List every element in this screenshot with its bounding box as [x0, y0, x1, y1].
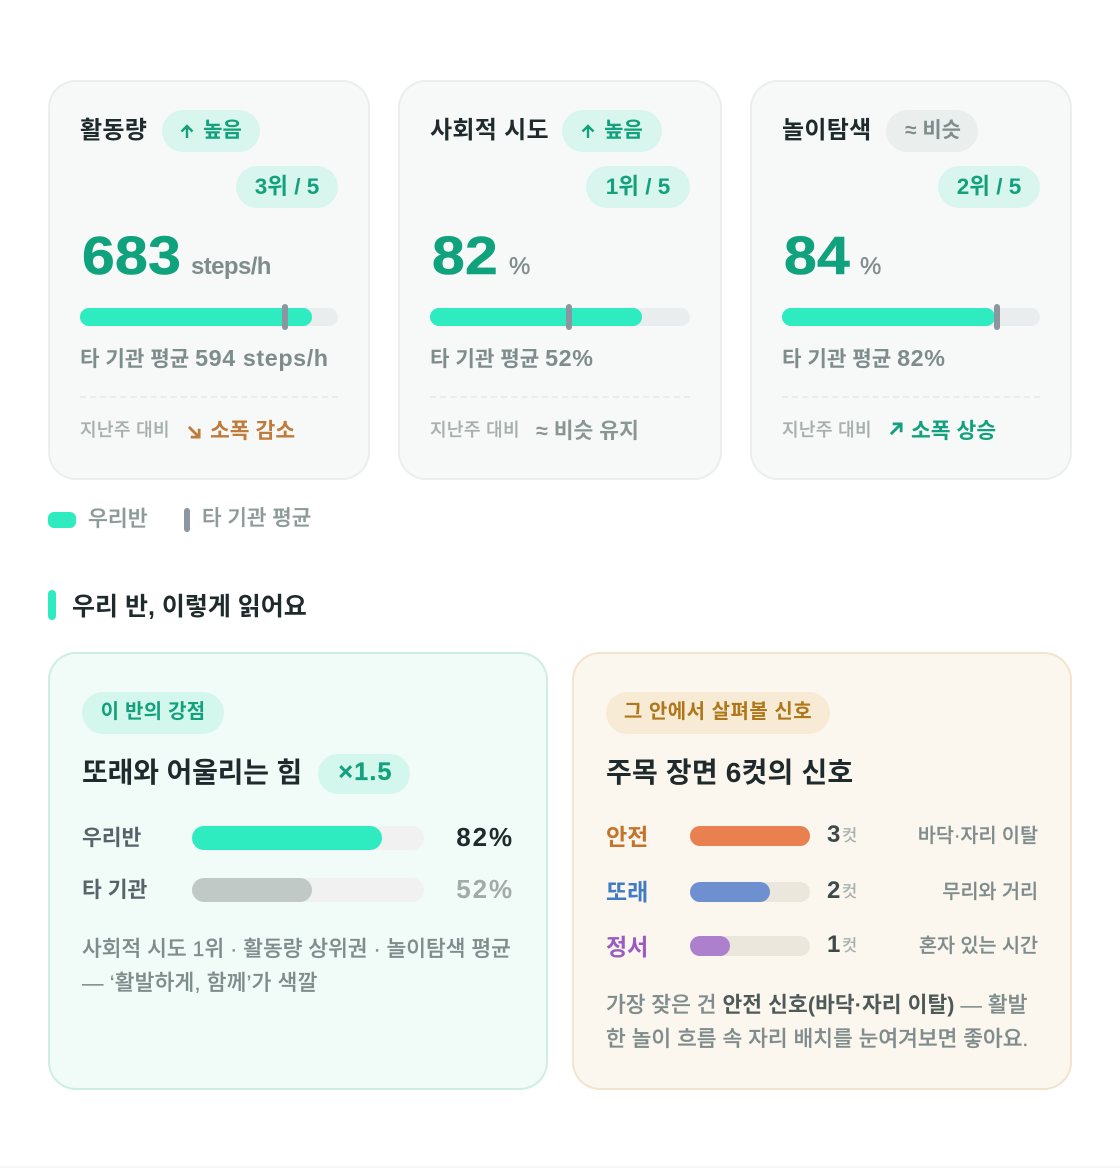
panel: signals	[572, 652, 1072, 1090]
rank pill: 3위 / 5	[255, 174, 319, 199]
rank pill	[236, 166, 338, 208]
count: emotion: 1	[827, 931, 840, 958]
metric card: 활동량	[48, 80, 370, 480]
big value: 82	[432, 226, 498, 286]
progress bar	[80, 308, 338, 326]
average marker	[994, 304, 1000, 330]
value: other institutions: 52%	[456, 874, 514, 904]
panel tag: 그 안에서 살펴볼 신호	[624, 701, 812, 723]
progress bar	[430, 308, 690, 326]
status pill: high	[162, 110, 260, 152]
legend swatch: our class	[48, 512, 76, 528]
average text: 타 기관 평균 594 steps/h	[80, 345, 329, 371]
comparison label: 지난주 대비	[430, 420, 520, 440]
description: emotion: 혼자 있는 시간	[919, 935, 1038, 957]
panel description: — ‘활발하게, 함께’가 색깔	[82, 971, 318, 995]
icon: arrow down-right	[188, 426, 201, 438]
bar: peers	[690, 882, 810, 902]
count unit: 컷	[842, 883, 857, 901]
panel: strength	[48, 652, 548, 1090]
comparison label: 지난주 대비	[782, 420, 872, 440]
rank pill: 1위 / 5	[606, 174, 670, 199]
bar: other institutions	[192, 878, 424, 902]
label: our class: 우리반	[82, 826, 141, 850]
panel tag	[82, 692, 224, 734]
heading text: 우리 반, 이렇게 읽어요	[72, 593, 307, 621]
label: emotion: 정서	[606, 934, 648, 960]
status pill: similar	[886, 110, 978, 152]
metric card: 놀이탐색	[750, 80, 1072, 480]
status pill: high: 높음	[604, 118, 643, 142]
count: peers: 2	[827, 877, 840, 904]
value: our class: 82%	[456, 822, 514, 852]
panel title: 주목 장면 6컷의 신호	[606, 757, 853, 788]
description: safety: 바닥·자리 이탈	[918, 825, 1038, 847]
multiplier pill	[318, 754, 410, 794]
card title: 사회적 시도	[430, 117, 549, 144]
card title: 놀이탐색	[782, 117, 872, 144]
legend label: our class: 우리반	[88, 506, 148, 531]
big value: 683	[82, 226, 181, 286]
panel description: 가장 잦은 건 안전 신호(바닥·자리 이탈) — 활발	[606, 993, 1027, 1017]
average marker	[566, 304, 572, 330]
label: peers: 또래	[606, 879, 648, 905]
icon: arrow up-right	[890, 422, 903, 436]
average text: 타 기관 평균 52%	[430, 345, 594, 371]
legend swatch: other average	[184, 508, 190, 532]
average text: 타 기관 평균 82%	[782, 345, 946, 371]
unit: steps/h	[191, 253, 271, 280]
unit: %	[509, 253, 530, 280]
average marker	[282, 304, 288, 330]
big value: 84	[784, 226, 850, 286]
comparison label: 지난주 대비	[80, 420, 170, 440]
panel description	[606, 993, 1028, 1051]
panel description: 한 놀이 흐름 속 자리 배치를 눈여겨보면 좋아요.	[606, 1027, 1028, 1051]
panel tag	[606, 692, 830, 734]
status pill: high: 높음	[203, 118, 242, 142]
multiplier pill: ×1.5	[338, 758, 393, 786]
unit: %	[860, 253, 881, 280]
status pill: similar: ≈ 비슷	[905, 118, 961, 142]
count unit: 컷	[842, 827, 857, 845]
count unit: 컷	[842, 937, 857, 955]
count: safety: 3	[827, 821, 840, 848]
legend label: other average: 타 기관 평균	[202, 507, 311, 530]
description: peers: 무리와 거리	[942, 881, 1038, 903]
panel description: 사회적 시도 1위 · 활동량 상위권 · 놀이탐색 평균	[82, 937, 511, 961]
rank pill: 2위 / 5	[957, 174, 1021, 199]
legend	[48, 506, 311, 532]
status pill: high	[562, 110, 662, 152]
weekly change: ≈ 비슷 유지	[536, 419, 639, 443]
weekly change: 소폭 감소	[210, 419, 295, 443]
panel tag: 이 반의 강점	[101, 701, 205, 723]
progress bar	[782, 308, 1040, 326]
section heading	[48, 590, 307, 621]
rank pill	[586, 166, 690, 208]
weekly change: 소폭 상승	[911, 419, 996, 443]
label: other institutions: 타 기관	[82, 878, 147, 902]
panel title: 또래와 어울리는 힘	[82, 757, 302, 788]
metric card: 사회적 시도	[398, 80, 722, 480]
bar: emotion	[690, 936, 810, 956]
label: safety: 안전	[606, 824, 648, 850]
bar: our class	[192, 826, 424, 850]
card title: 활동량	[80, 117, 147, 144]
panel description	[82, 937, 511, 995]
rank pill	[938, 166, 1040, 208]
bar: safety	[690, 826, 810, 846]
heading accent	[48, 590, 56, 620]
